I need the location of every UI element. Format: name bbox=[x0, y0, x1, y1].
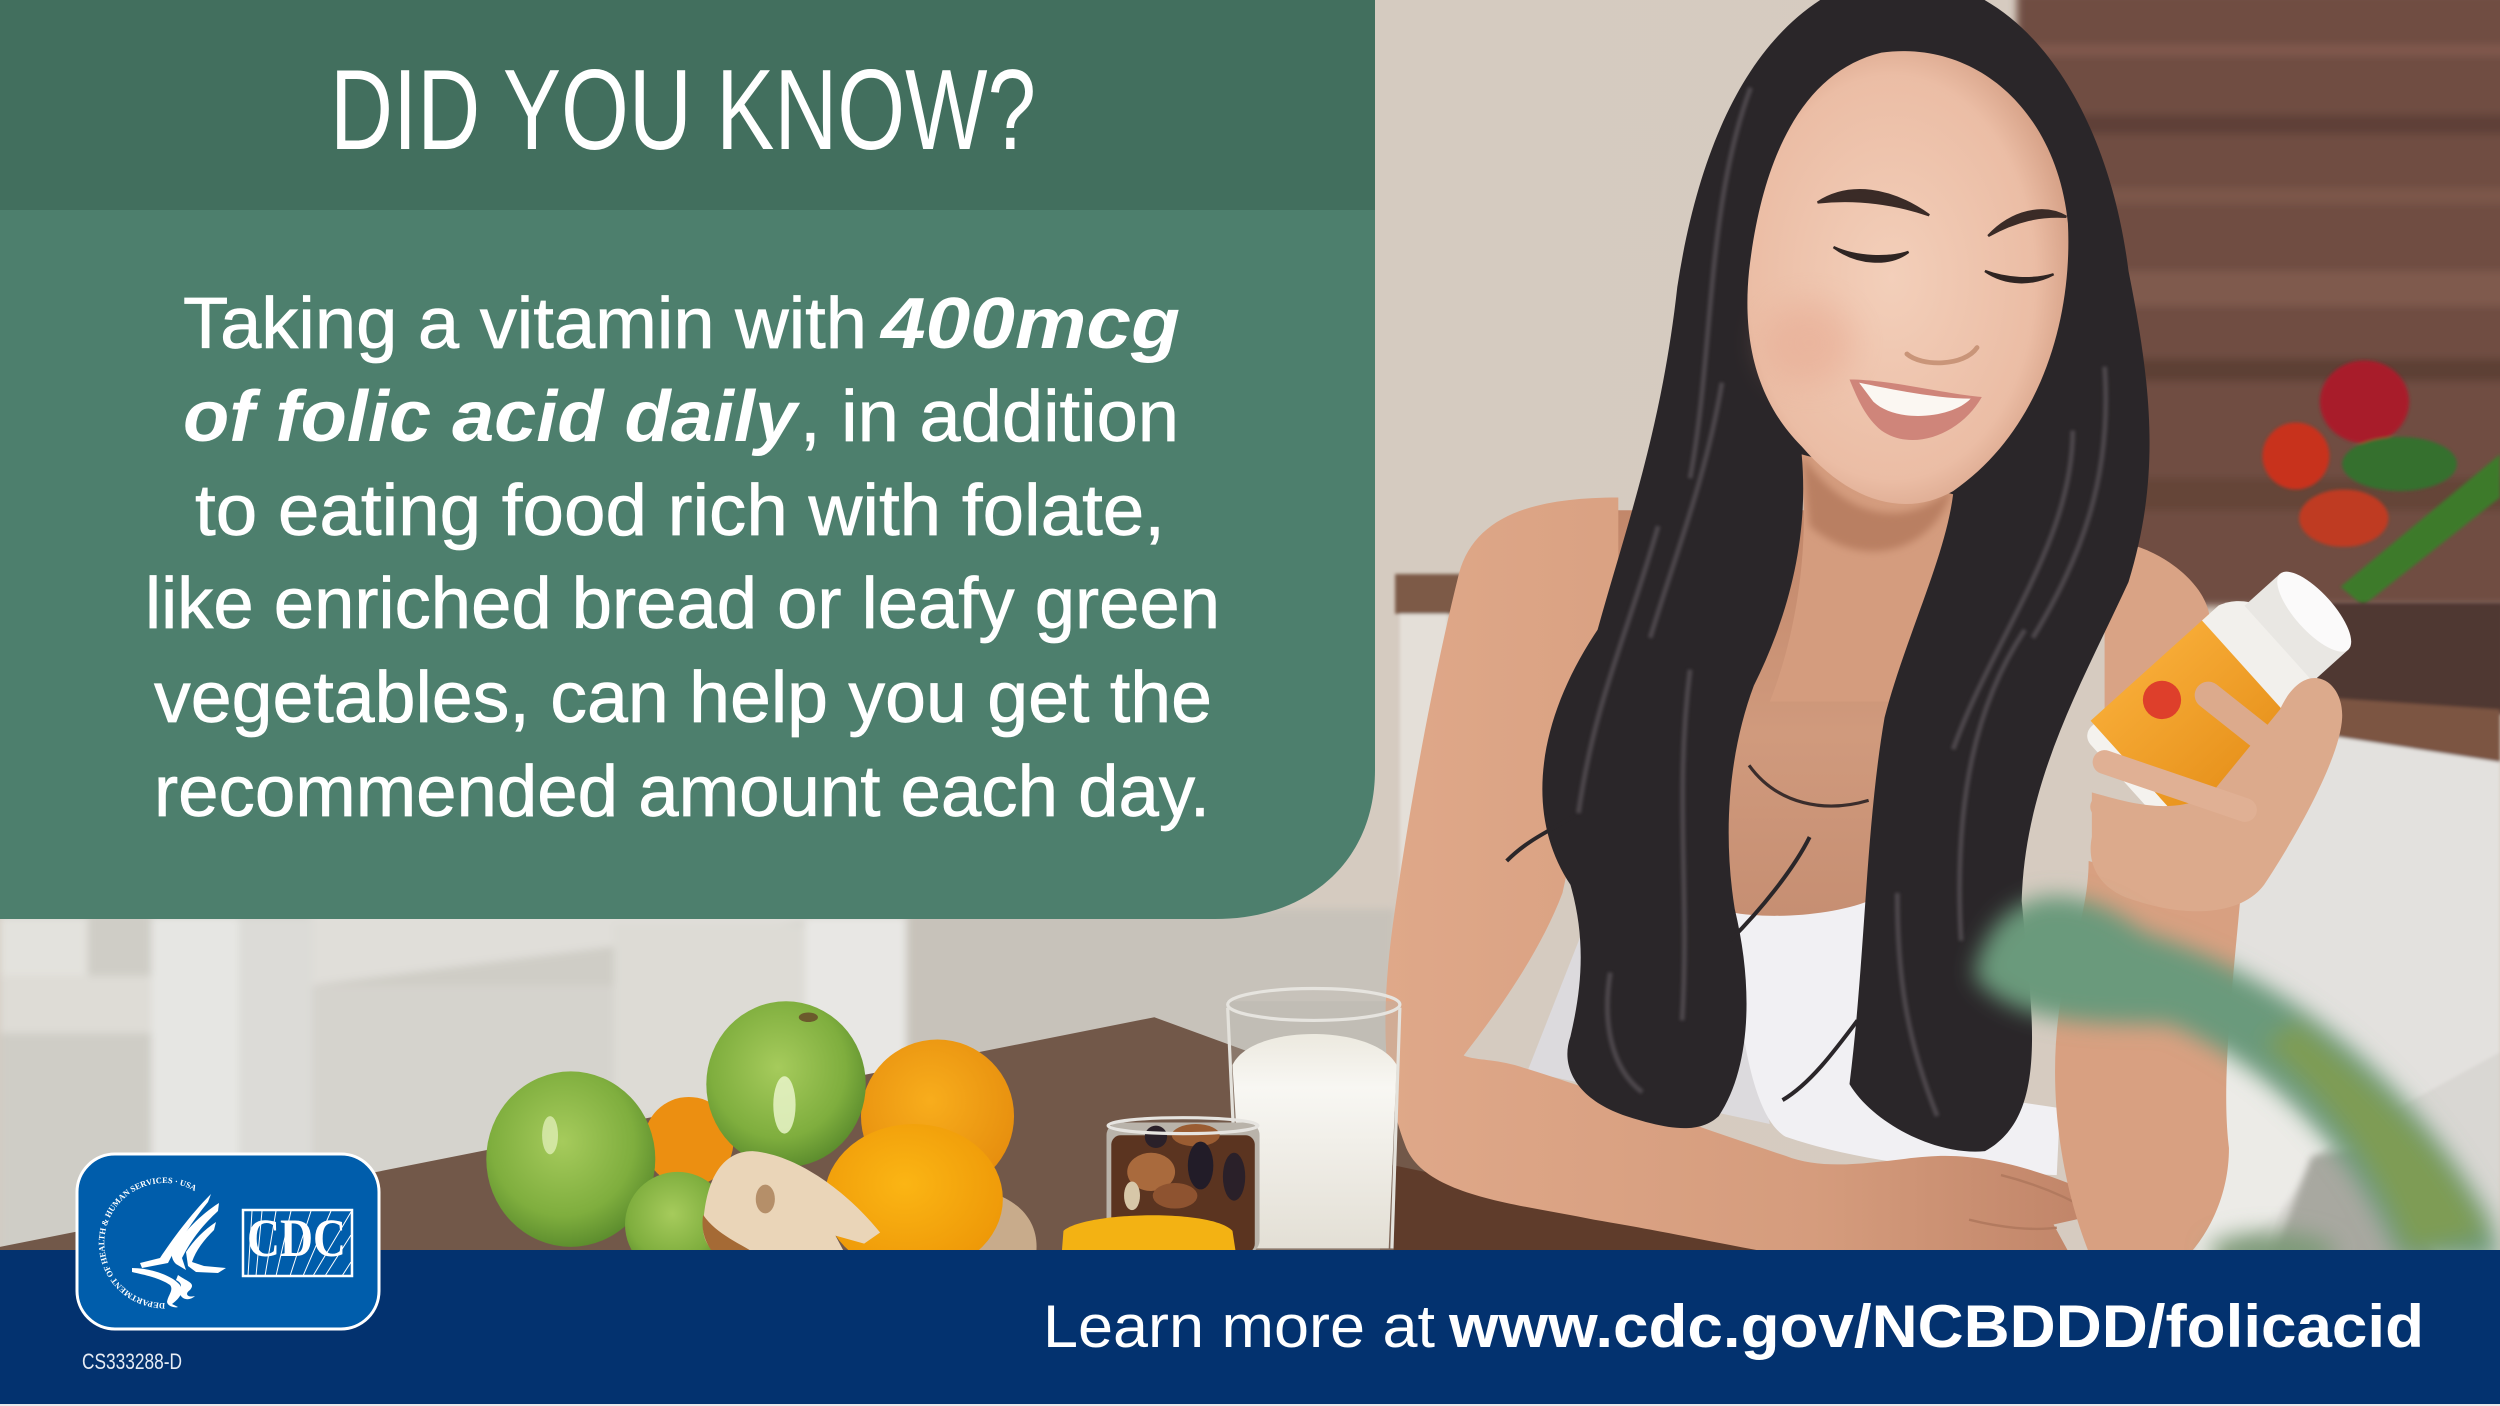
vitamin bottle bbox=[2079, 548, 2374, 833]
glass of milk bbox=[1226, 989, 1401, 1253]
bottle label mark bbox=[2143, 681, 2181, 719]
stray hair strands bbox=[1507, 813, 1857, 1100]
title: did you know: DID YOU KNOW? bbox=[330, 47, 1036, 174]
CDC logo: CDC bbox=[247, 1208, 346, 1268]
eyebrows bbox=[1818, 190, 2066, 236]
counter and white cabinets bbox=[1395, 574, 2500, 1260]
white tank top bbox=[1527, 901, 1770, 1124]
logo: HHS and CDC badge bbox=[76, 1152, 380, 1330]
orange bottle lid on the table bbox=[1062, 1215, 1236, 1252]
body text block: , in addition bbox=[800, 377, 1179, 457]
cheek blush bbox=[1765, 301, 1854, 384]
wooden table bbox=[0, 1017, 1802, 1260]
neck bbox=[1770, 430, 1969, 702]
glass of mixed nuts bbox=[1107, 1118, 1260, 1253]
blurred tomatoes and greens bbox=[2262, 360, 2500, 606]
body text block: 400mcg bbox=[879, 284, 1180, 364]
far upper arm bbox=[2105, 545, 2210, 749]
shadow under chin bbox=[1802, 454, 1953, 551]
white cushion and grey clothing bbox=[2192, 1036, 2328, 1260]
info panel: body background bbox=[0, 200, 1375, 919]
necklace bbox=[1749, 765, 1869, 806]
HHS seal lettering: DEPARTMENT OF HEALTH & HUMAN SERVICES · USA bbox=[98, 1178, 196, 1309]
chest bbox=[1594, 510, 1905, 957]
call to action: learn more url: Learn more at bbox=[1043, 1293, 1435, 1360]
body text block: like enriched bread or leafy green bbox=[145, 564, 1220, 644]
eyes bbox=[1834, 247, 2054, 282]
near arm and forearm bbox=[1385, 497, 2098, 1260]
body text block: recommended amount each day. bbox=[154, 752, 1210, 832]
badge background bbox=[77, 1154, 379, 1329]
hand and fingers bbox=[2091, 678, 2342, 911]
HHS eagle icon bbox=[132, 1194, 226, 1307]
call to action: learn more url bbox=[1043, 1293, 2424, 1360]
hair mass bbox=[1542, 0, 2150, 1152]
body text block: vegetables, can help you get the bbox=[154, 658, 1212, 738]
forearm holding bottle bbox=[2055, 861, 2240, 1260]
face bbox=[1747, 51, 2068, 504]
publication code: CS333288-D bbox=[82, 1349, 182, 1374]
body text block: of folic acid daily bbox=[183, 377, 801, 457]
blurred plant leaf in foreground bbox=[1974, 896, 2500, 1271]
background room behind fruit bbox=[0, 909, 1395, 1260]
heading band bbox=[0, 0, 1375, 210]
hair highlights bbox=[1578, 88, 2106, 1116]
mouth bbox=[1849, 379, 1982, 440]
fruit bowl with apples, oranges and pear bbox=[486, 1001, 1037, 1277]
body text block bbox=[145, 284, 1220, 832]
woman holding vitamin bottle bbox=[1385, 0, 2500, 1271]
call to action: learn more url: www.cdc.gov/NCBDDD/folicacid bbox=[1448, 1293, 2424, 1360]
nose bbox=[1907, 348, 1977, 363]
body text block: to eating food rich with folate, bbox=[195, 471, 1165, 551]
footer bar bbox=[0, 1250, 2500, 1404]
body text block: Taking a vitamin with bbox=[183, 284, 867, 364]
blurred wood cabinet bbox=[2017, 0, 2500, 606]
